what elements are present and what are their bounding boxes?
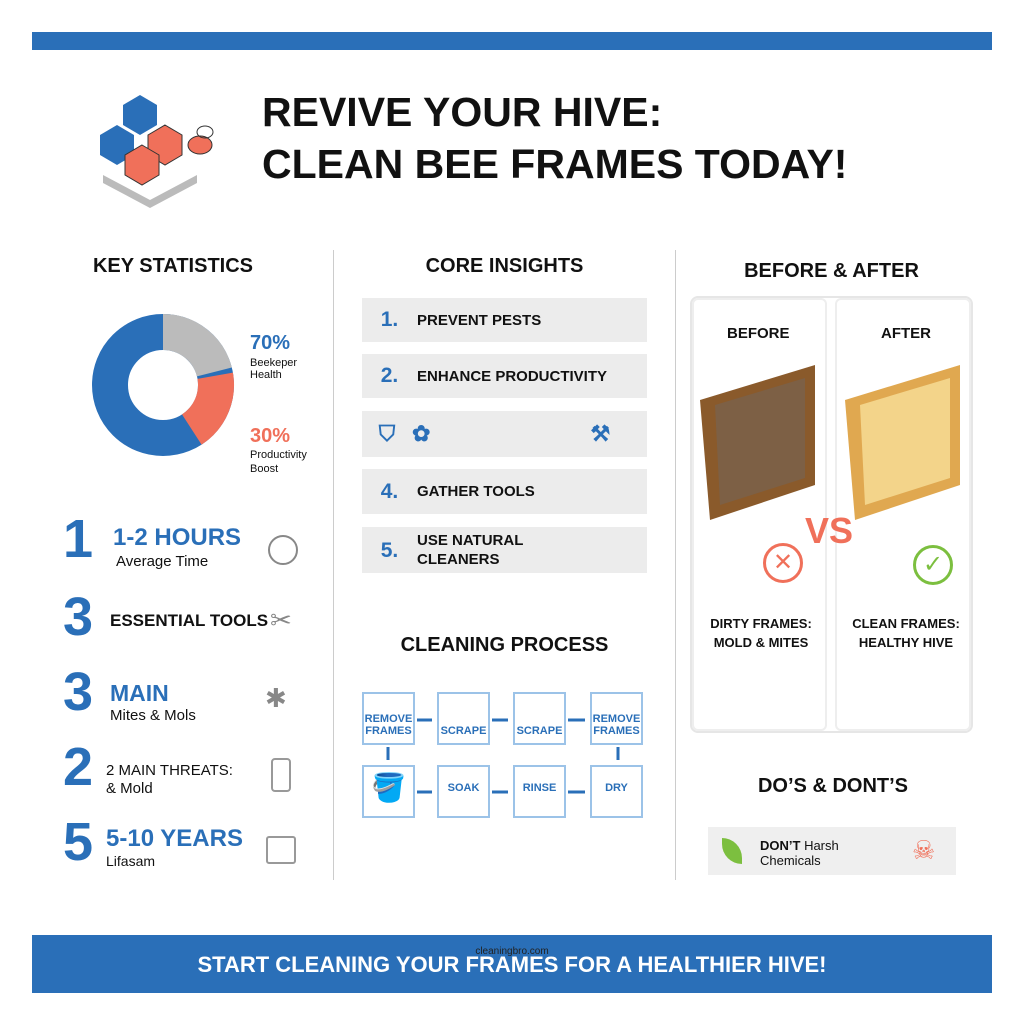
text: AFTER: [881, 325, 931, 342]
text: DON’T Harsh: [760, 838, 839, 853]
panel: key statistics: KEY STATISTICS: [93, 255, 253, 277]
text: BEFORE: [727, 325, 790, 342]
text: 4.: [381, 480, 398, 502]
text: ⛉: [379, 421, 395, 446]
logo: [100, 95, 214, 208]
text: 1: [63, 509, 93, 569]
title: REVIVE YOUR HIVE:: [262, 89, 662, 135]
text: 1-2 HOURS: [113, 524, 241, 551]
text: Average Time: [116, 553, 208, 570]
text: HEALTHY HIVE: [859, 635, 953, 650]
text: RINSE: [523, 782, 556, 794]
text: ✕: [773, 549, 793, 576]
do's & dont's: DO’S & DONT’S: [758, 775, 908, 797]
text: cleaningbro.com: [475, 946, 549, 957]
text: REMOVE: [365, 713, 412, 725]
text: & Mold: [106, 780, 153, 797]
text: CLEAN FRAMES:: [852, 616, 960, 631]
text: FRAMES: [365, 725, 412, 737]
text: MAIN: [110, 680, 169, 706]
text: 5-10 YEARS: [106, 825, 243, 852]
text: 2.: [381, 364, 398, 387]
text: SOAK: [448, 782, 479, 794]
text: ✱: [265, 683, 287, 713]
panel: key statistics: 30%: [250, 425, 290, 447]
text: 5: [63, 812, 93, 872]
text: GATHER TOOLS: [417, 483, 535, 500]
text: SCRAPE: [517, 725, 562, 737]
text: 1.: [381, 308, 398, 331]
text: 3: [63, 587, 93, 647]
text: ☠: [912, 835, 935, 865]
text: ESSENTIAL TOOLS: [110, 611, 268, 630]
icons: [268, 535, 298, 565]
text: 2 MAIN THREATS:: [106, 762, 233, 779]
title: CLEAN BEE FRAMES TODAY!: [262, 141, 847, 187]
top bar: [32, 32, 992, 50]
text: ✂: [270, 605, 292, 635]
text: 3: [63, 662, 93, 722]
text: DIRTY FRAMES:: [710, 616, 812, 631]
text: Lifasam: [106, 853, 155, 869]
panel: key statistics: Beekeper: [250, 357, 297, 369]
frames: [700, 365, 960, 520]
text: MOLD & MITES: [714, 635, 808, 650]
text: 🪣: [371, 772, 406, 803]
panel: key statistics: Health: [250, 369, 282, 381]
text: REMOVE: [593, 713, 640, 725]
panel: key statistics: 70%: [250, 332, 290, 354]
bottom banner: START CLEANING YOUR FRAMES FOR A HEALTHIER HIVE!: [197, 952, 827, 977]
cleaning process: CLEANING PROCESS: [401, 634, 608, 656]
text: ⚒: [590, 421, 610, 446]
text: Mites & Mols: [110, 707, 196, 724]
text: ✿: [412, 421, 430, 446]
text: PREVENT PESTS: [417, 312, 541, 328]
text: ✓: [923, 551, 943, 578]
text: ENHANCE PRODUCTIVITY: [417, 368, 607, 384]
text: 5.: [381, 538, 398, 562]
text: DRY: [605, 782, 628, 794]
panel: before & after: BEFORE & AFTER: [744, 260, 919, 282]
text: FRAMES: [593, 725, 640, 737]
title: [262, 89, 847, 187]
panel: key statistics: Productivity: [250, 449, 307, 461]
text: 2: [63, 737, 93, 797]
text: SCRAPE: [441, 725, 486, 737]
panel: key statistics: Boost: [250, 463, 278, 475]
text: USE NATURAL: [417, 532, 523, 549]
text: CLEANERS: [417, 551, 500, 568]
panel: core insights: CORE INSIGHTS: [426, 255, 583, 277]
panel: key statistics: [92, 255, 307, 475]
bottom banner: [32, 935, 992, 993]
text: Chemicals: [760, 853, 821, 868]
text: VS: [805, 510, 853, 551]
